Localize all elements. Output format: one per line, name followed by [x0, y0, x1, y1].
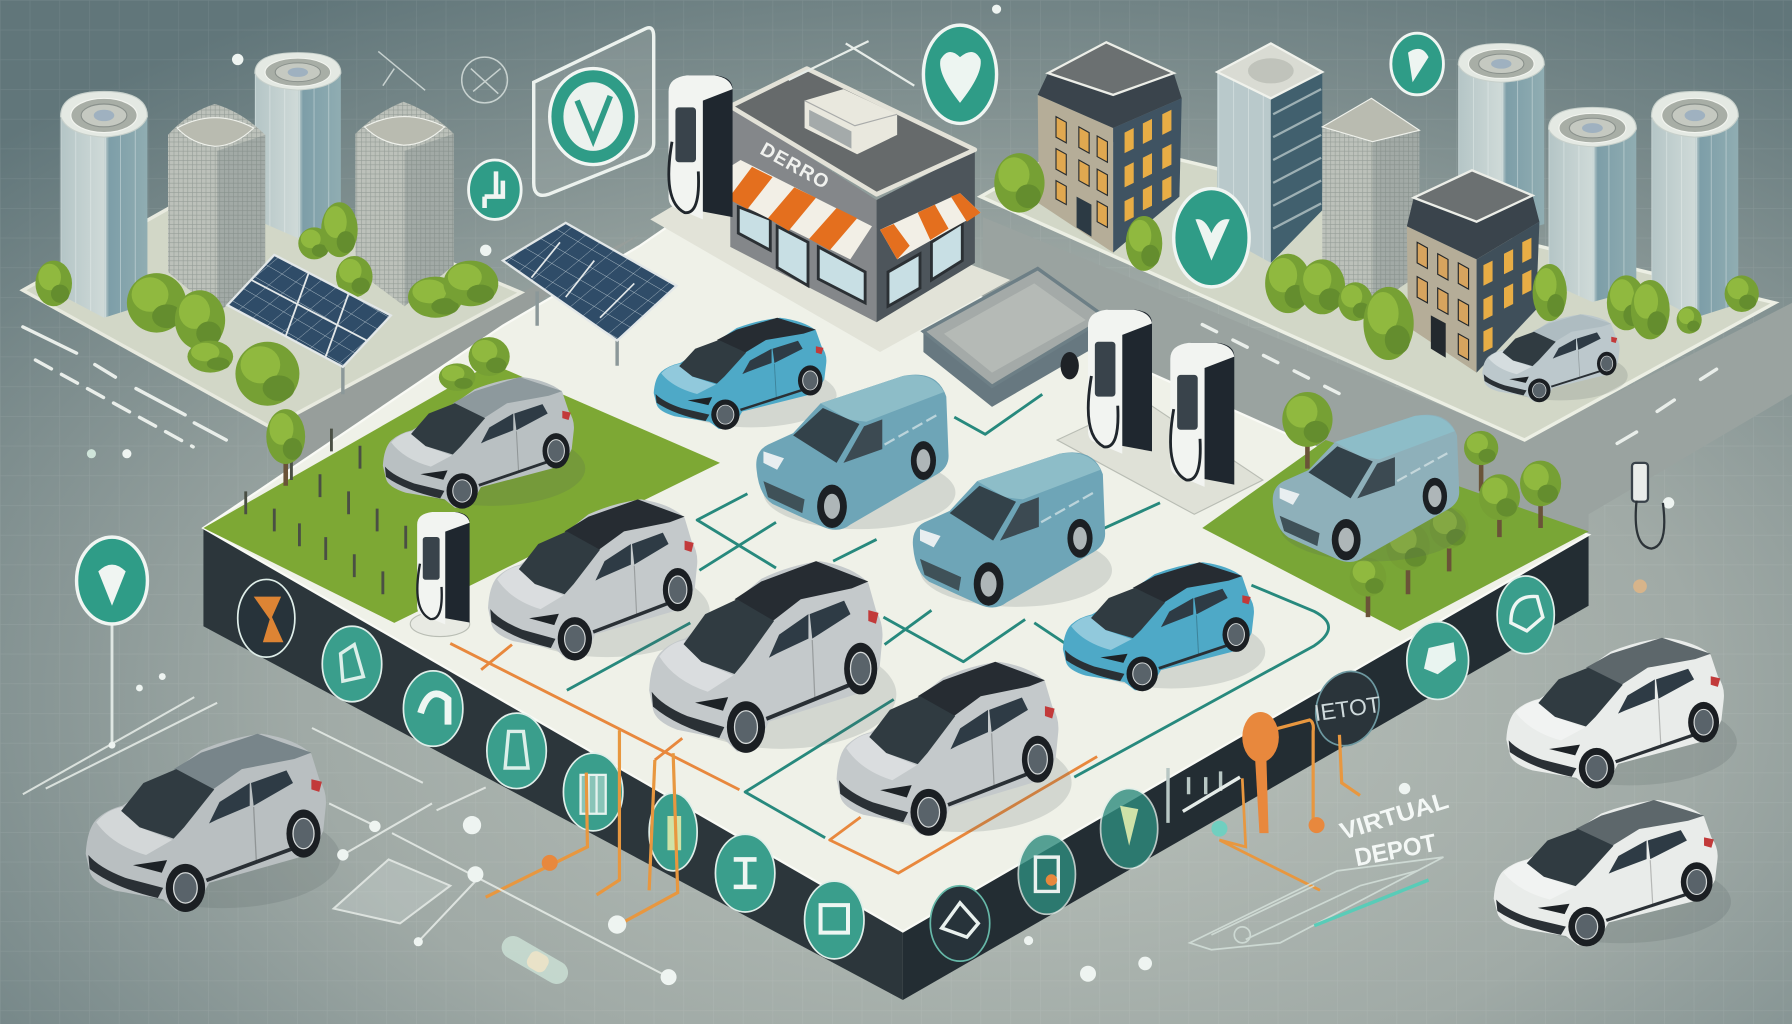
- orange pin drop: [1242, 712, 1279, 833]
- orange and teal nodes: [542, 817, 1325, 886]
- sketch tag icon: [378, 51, 507, 103]
- awning front: [710, 160, 872, 259]
- tower 1: [255, 53, 341, 238]
- ground pad: [23, 171, 521, 427]
- badge 5: [563, 753, 623, 831]
- badge 12: [1407, 622, 1469, 699]
- glass tower C: [1651, 91, 1738, 318]
- charger base: [1057, 400, 1263, 514]
- charger left lawn: [410, 512, 470, 637]
- small lawn figures: [246, 429, 406, 594]
- charger two: [1170, 343, 1234, 487]
- blue hatchback rear: [654, 318, 837, 430]
- tower 3: [168, 104, 265, 313]
- silver car front: [837, 662, 1072, 836]
- glass tower B: [1549, 107, 1636, 302]
- silver car street: [1482, 314, 1628, 402]
- badge 3: [403, 671, 463, 746]
- white depot surface: [203, 183, 1589, 931]
- glass block tower: [1217, 43, 1322, 263]
- left side wall: [203, 528, 903, 1000]
- road network: [23, 217, 1792, 535]
- silver car centre left: [488, 499, 710, 661]
- badge 1: [238, 579, 295, 657]
- brick building right: [1407, 170, 1539, 373]
- badge 8: [805, 881, 864, 959]
- silver car on lawn: [383, 377, 585, 509]
- charging station pair: [1057, 310, 1263, 514]
- flatbed trailer: [923, 269, 1106, 407]
- store sign text: DERRO: [756, 138, 833, 194]
- badge 4: [487, 713, 546, 789]
- store forecourt: [650, 171, 1010, 352]
- store walls: [730, 106, 975, 322]
- charger behind store: [669, 75, 733, 219]
- floor sketch lines left: [23, 697, 669, 977]
- badge 7: [715, 834, 775, 912]
- charger one: [1088, 310, 1152, 454]
- left city block: [23, 53, 521, 427]
- brick building left: [1038, 42, 1182, 253]
- depot logo badge: [1306, 663, 1388, 754]
- virtual depot label: VIRTUAL: [1337, 787, 1452, 846]
- van one: [756, 375, 955, 530]
- awning side: [880, 193, 981, 259]
- depot base platform: [203, 183, 1589, 1000]
- silver car centre: [649, 561, 896, 753]
- drop marker: [1391, 33, 1443, 95]
- badge 2: [322, 626, 382, 702]
- store building: [650, 69, 1010, 352]
- outlined verification sign: [534, 28, 654, 195]
- van right: [1273, 415, 1466, 562]
- tower 2: [61, 91, 147, 318]
- blue hatchback front: [1063, 562, 1265, 691]
- right side wall: [903, 535, 1589, 1000]
- depot logo badge: IETOT: [1313, 691, 1382, 726]
- silver car bottom left: [86, 734, 340, 912]
- store roof: [730, 69, 975, 194]
- badge 6: [649, 793, 697, 871]
- virtual depot label: [1337, 787, 1452, 872]
- left lawn: [203, 363, 720, 623]
- right lawn: [1202, 440, 1589, 631]
- badge 9: [930, 886, 990, 961]
- bushes: [35, 202, 498, 406]
- solar panel centre: [503, 223, 677, 366]
- orange connector lines: [486, 720, 1360, 927]
- map pin marker left: [77, 537, 147, 749]
- lawn and street trees: [266, 337, 1561, 617]
- badge 11: [1101, 789, 1158, 869]
- white car right bottom: [1494, 800, 1731, 946]
- V marker: [1174, 189, 1249, 287]
- rooftop AC unit: [805, 89, 897, 154]
- virtual depot label: DEPOT: [1352, 829, 1439, 872]
- small teal marker tool: [469, 160, 521, 219]
- solar panel left: [227, 255, 391, 394]
- glass tower A: [1458, 43, 1544, 236]
- wall sketch marks: [1168, 768, 1240, 823]
- van two: [913, 452, 1112, 608]
- heart marker: [789, 25, 997, 123]
- mesh tower: [1322, 98, 1419, 306]
- charging cables on depot floor: [450, 394, 1329, 873]
- ground pad: [981, 137, 1775, 440]
- small wall charger icon right: [1632, 463, 1664, 549]
- tower 4: [355, 102, 454, 306]
- wall badges: [238, 576, 1554, 961]
- blurred capsule on floor: [497, 932, 572, 988]
- store windows: [738, 207, 962, 306]
- right city block: [981, 42, 1775, 440]
- badge 10: [1018, 834, 1075, 914]
- street bushes: [994, 153, 1759, 360]
- badge 13: [1497, 576, 1554, 654]
- holographic car sketch: [1190, 857, 1443, 950]
- white car right top: [1506, 638, 1737, 789]
